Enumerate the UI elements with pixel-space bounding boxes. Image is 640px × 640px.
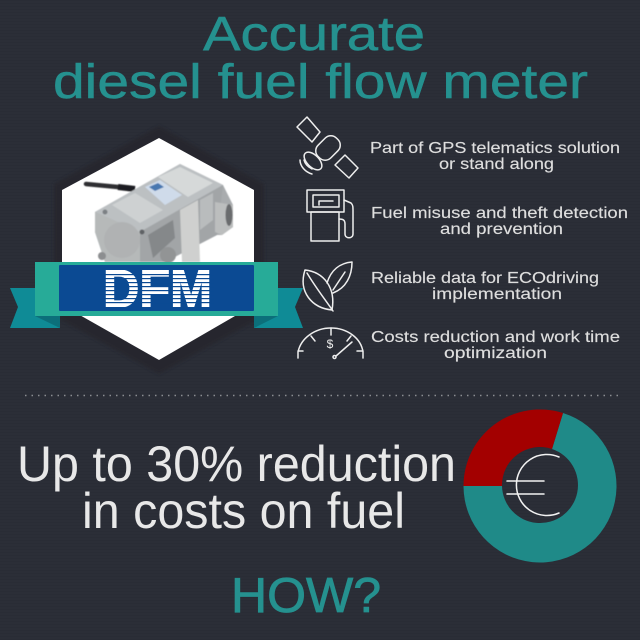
red segment: 30%	[464, 409, 563, 486]
teal segment	[464, 413, 616, 562]
feature: theft detection: Fuel misuse and theft detection	[371, 205, 628, 222]
product photo: flow meter	[86, 164, 233, 263]
feature: costs: Costs reduction and work time	[371, 329, 620, 346]
title	[53, 8, 588, 109]
feature: ECOdriving: implementation	[432, 286, 562, 303]
title: diesel fuel flow meter	[53, 56, 588, 109]
headline: cost reduction	[17, 436, 456, 539]
white hexagon	[62, 138, 254, 360]
feature: theft detection	[371, 205, 628, 238]
title: Accurate	[203, 8, 425, 61]
feature: ECOdriving: Reliable data for ECOdriving	[371, 270, 599, 287]
icon: fuel pump	[307, 190, 353, 241]
hexagon shadow	[54, 126, 264, 374]
icon: cost gauge	[298, 328, 363, 358]
feature list	[370, 140, 628, 362]
feature: costs	[371, 329, 620, 362]
DFM logo: DFM	[103, 259, 212, 319]
blue DFM plate	[59, 265, 254, 311]
feature: GPS: or stand along	[439, 156, 554, 173]
donut chart	[464, 409, 616, 562]
ribbon left tail	[10, 288, 60, 328]
headline: cost reduction: in costs on fuel	[82, 483, 405, 539]
feature: ECOdriving	[371, 270, 599, 303]
feature: GPS	[370, 140, 620, 173]
icon: leaves	[303, 262, 352, 311]
ribbon band	[35, 262, 278, 316]
logo stripes	[100, 268, 214, 310]
badge: DFM product hexagon with ribbon	[10, 126, 303, 374]
call to action: HOW?	[231, 569, 381, 623]
ribbon right tail	[254, 288, 303, 328]
feature: costs: optimization	[444, 345, 547, 362]
feature: GPS: Part of GPS telematics solution	[370, 140, 620, 157]
headline: cost reduction: Up to 30% reduction	[17, 436, 456, 492]
icon: dollar sign: $	[327, 337, 334, 351]
icon: satellite	[297, 117, 358, 178]
icon: euro	[507, 454, 559, 515]
feature: theft detection: and prevention	[440, 221, 563, 238]
ribbon fold shadows	[35, 316, 60, 328]
